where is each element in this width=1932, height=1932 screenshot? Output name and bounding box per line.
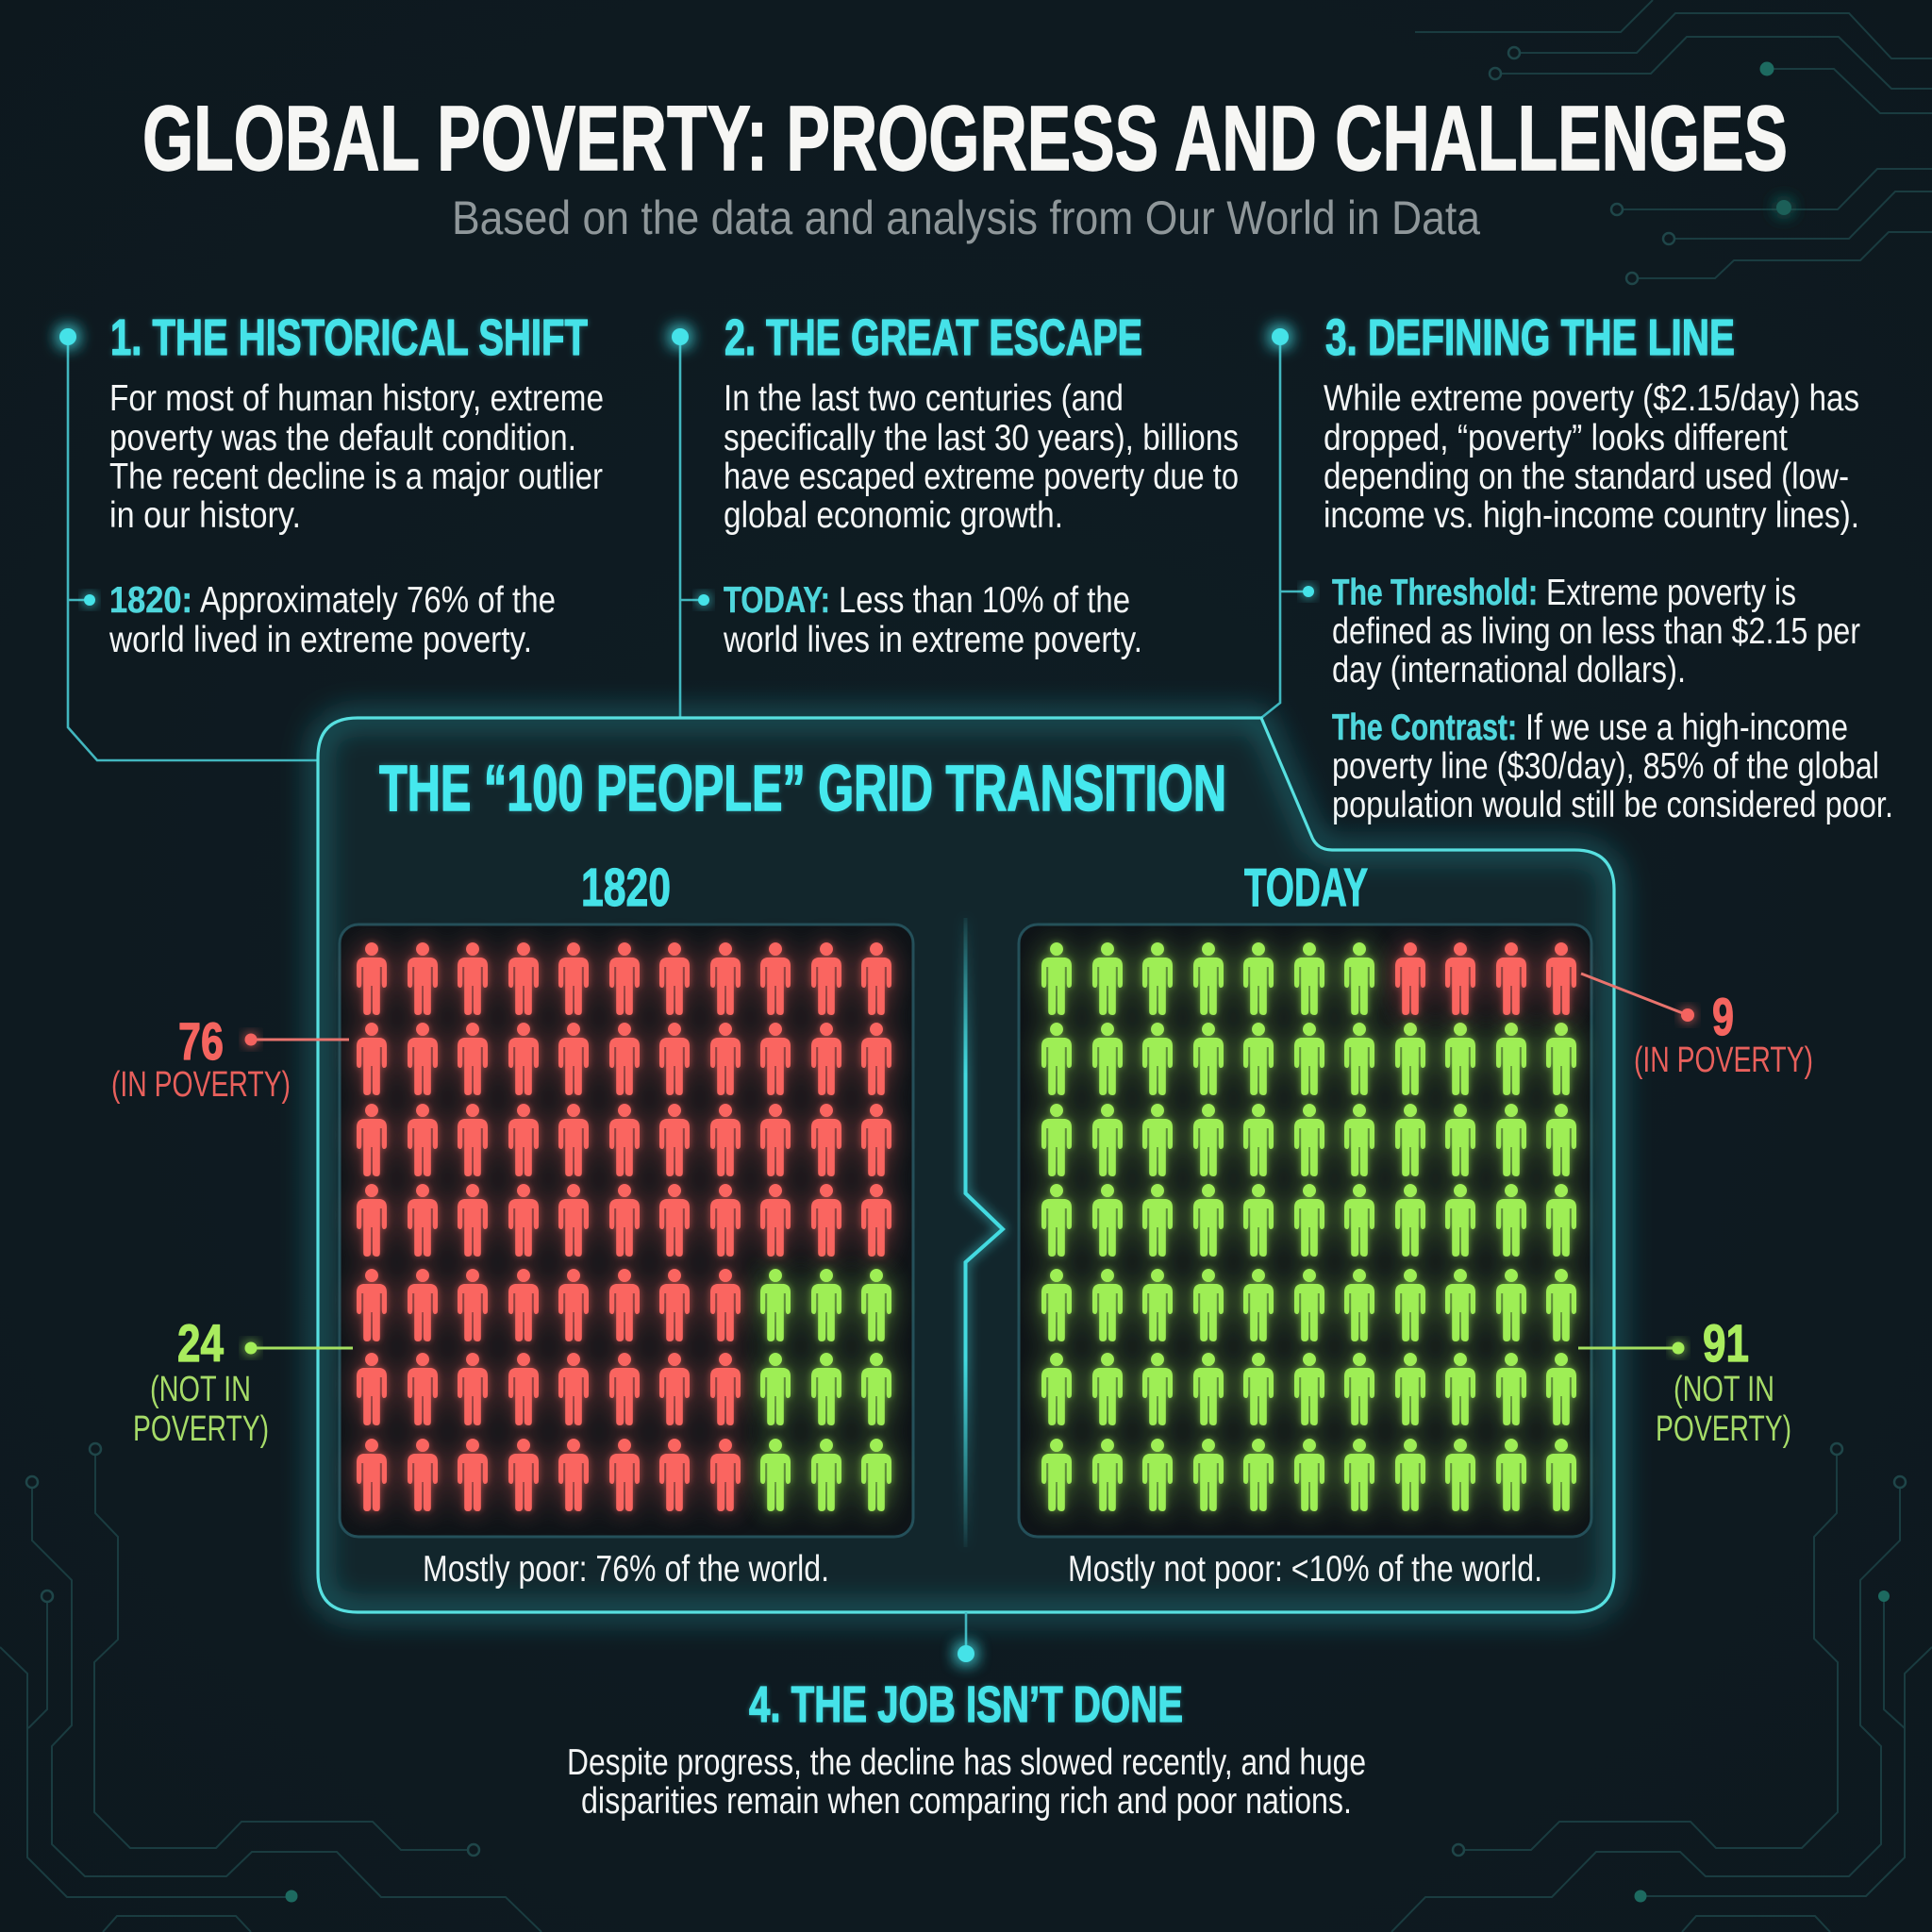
section 2 bullet: today: world lives in extreme poverty.: [723, 620, 1142, 660]
grid background: 1820: [340, 924, 913, 1537]
section 1 body: [109, 378, 604, 536]
caption: 1820: Mostly poor: 76% of the world.: [423, 1549, 829, 1590]
section 1 body: The recent decline is a major outlier: [109, 457, 603, 497]
section 3 bullet: the threshold: day (international dollars).: [1332, 650, 1686, 691]
section 2 body: specifically the last 30 years), billions: [724, 418, 1239, 458]
section 2 heading: 2. THE GREAT ESCAPE: [724, 309, 1142, 366]
section 4: the job isn't done: [567, 1612, 1366, 1822]
section 3 body: income vs. high-income country lines).: [1324, 495, 1859, 536]
section 3 bullet: the threshold: [1303, 573, 1860, 691]
section 3 body: dropped, “poverty” looks different: [1324, 418, 1788, 458]
section 3 bullet: the contrast: [1332, 708, 1893, 825]
section 2 bullet: today: [698, 580, 1142, 660]
panel divider with chevron arrow: [966, 918, 1003, 1547]
1820 grid heading: 1820: [581, 858, 671, 918]
section 3 bullet: the threshold: The Threshold:: [1332, 573, 1538, 613]
callout: 24 not in poverty: [133, 1313, 353, 1449]
subtitle: Based on the data and analysis from Our World in Data: [452, 192, 1480, 244]
callout: 9 in poverty: [1581, 974, 1813, 1080]
section 3 body: depending on the standard used (low-: [1324, 457, 1849, 497]
section 3 marker dot: [1272, 328, 1289, 345]
callout: 76 in poverty: (IN POVERTY): [111, 1065, 291, 1105]
callout: 9 in poverty: 9: [1712, 987, 1734, 1046]
today people grid: red figures: [1395, 942, 1576, 1015]
1820 people grid: red figures: [357, 942, 891, 1511]
section 2: the great escape: [672, 309, 1239, 660]
section 2 bullet: today: TODAY:: [724, 580, 830, 621]
section 3 heading: 3. DEFINING THE LINE: [1325, 309, 1735, 366]
callout: 24 not in poverty: (NOT IN: [150, 1370, 251, 1409]
callout: 91 not in poverty: (NOT IN: [1674, 1370, 1774, 1409]
section 1 bullet: 1820: [84, 580, 556, 660]
panel heading: THE “100 PEOPLE” GRID TRANSITION: [379, 752, 1226, 824]
callout: 9 in poverty: (IN POVERTY): [1634, 1041, 1813, 1080]
connector lines to the grid panel: [68, 337, 1308, 760]
section 1: the historical shift: [59, 309, 604, 660]
section 1 bullet: 1820: 1820:: [109, 580, 192, 621]
callout: 24 not in poverty: 24: [177, 1313, 224, 1373]
section 1 heading: 1. THE HISTORICAL SHIFT: [110, 309, 588, 366]
callout: 91 not in poverty: 91: [1703, 1313, 1749, 1373]
section 3 bullet: the contrast: The Contrast:: [1332, 708, 1517, 748]
section 2 body: have escaped extreme poverty due to: [724, 457, 1239, 497]
section 1 body: poverty was the default condition.: [109, 418, 576, 458]
section 4 body: [567, 1742, 1366, 1822]
section 1 body: in our history.: [109, 495, 301, 536]
section 2 body: global economic growth.: [724, 495, 1063, 536]
section 3 bullet: the contrast: If we use a high-income: [1525, 708, 1848, 748]
section 2 bullet: today: Less than 10% of the: [839, 580, 1130, 621]
section 4 body: disparities remain when comparing rich and poor nations.: [581, 1781, 1352, 1822]
section 2 marker dot: [672, 328, 689, 345]
callout: 24 not in poverty: POVERTY): [133, 1409, 269, 1449]
1820 people grid: green figures: [760, 1269, 891, 1511]
callout: 76 in poverty: 76: [178, 1011, 224, 1071]
grid background: today: [1019, 924, 1591, 1537]
section 1 bullet: 1820: Approximately 76% of the: [200, 580, 556, 621]
section 1 body: For most of human history, extreme: [109, 378, 604, 419]
section 3 bullet: the threshold: Extreme poverty is: [1546, 573, 1796, 613]
section 2 body: In the last two centuries (and: [724, 378, 1124, 419]
section 3: defining the line: [1272, 309, 1893, 825]
today grid heading: TODAY: [1244, 858, 1368, 918]
section 4 connector and dot: [958, 1612, 974, 1662]
caption: today: Mostly not poor: <10% of the world.: [1068, 1549, 1542, 1590]
section 2 body: [724, 378, 1239, 536]
panel: 100 people grid transition: [318, 718, 1614, 1612]
section 4 body: Despite progress, the decline has slowed recently, and huge: [567, 1742, 1366, 1783]
section 3 body: [1324, 378, 1859, 536]
callout: 91 not in poverty: POVERTY): [1656, 1409, 1791, 1449]
today people grid: green figures: [1041, 942, 1576, 1511]
section 1 bullet: 1820: world lived in extreme poverty.: [108, 620, 532, 660]
callout: 91 not in poverty: [1578, 1313, 1791, 1449]
section 4 heading: 4. THE JOB ISN’T DONE: [749, 1676, 1183, 1733]
callout: 76 in poverty: [111, 1011, 349, 1105]
section 1 marker dot: [59, 328, 76, 345]
